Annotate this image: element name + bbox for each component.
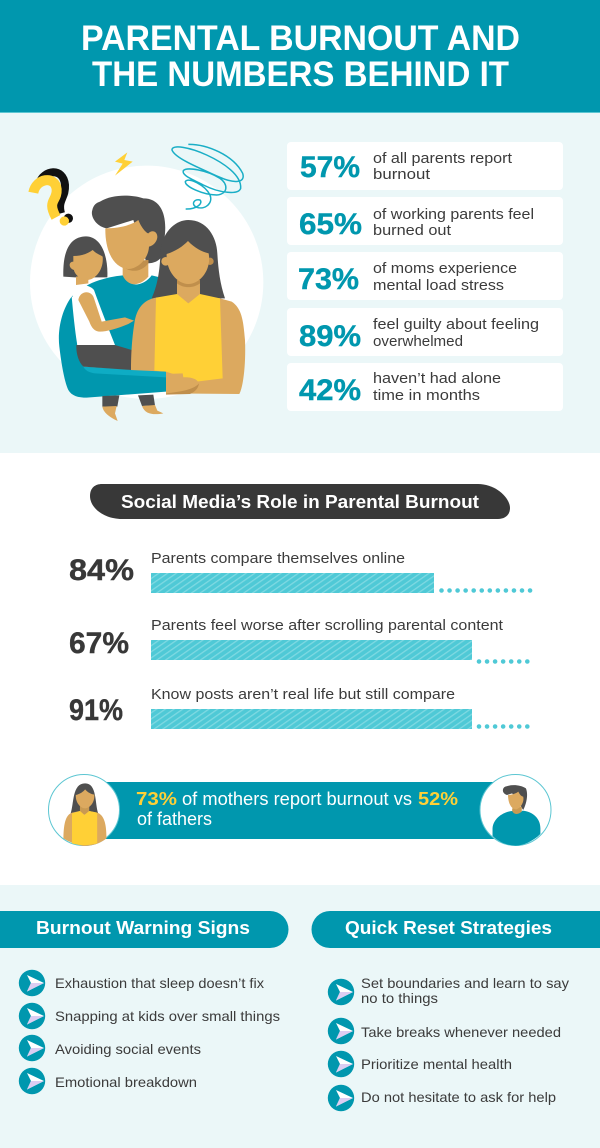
callout text: of fathers bbox=[137, 808, 212, 829]
stat card: 89%: feel guilty about feeling bbox=[373, 317, 539, 333]
callout text: 52% bbox=[418, 788, 458, 809]
stat card: 73%: 73% bbox=[298, 263, 359, 296]
panel: warning signs and strategies bbox=[0, 885, 600, 1148]
bar row: 84%: Parents compare themselves online bbox=[151, 551, 405, 567]
man: teal body and arm bbox=[72, 275, 173, 353]
stat card: 57%: burnout bbox=[373, 167, 430, 183]
item: ask for help bbox=[328, 1085, 556, 1111]
heading pill: Social Media’s Role in Parental Burnout bbox=[121, 491, 479, 512]
illustration: stressed family bbox=[30, 144, 263, 421]
stat card: 42% bbox=[287, 363, 563, 411]
callout: mothers vs fathers bbox=[48, 774, 551, 846]
heading pill bbox=[90, 484, 510, 519]
title: THE NUMBERS BEHIND IT bbox=[92, 55, 509, 94]
stat card: 89% bbox=[287, 308, 563, 356]
bar row: 67%: Parents feel worse after scrolling parental content bbox=[151, 618, 503, 634]
bar row: 91%: Know posts aren’t real life but still compare bbox=[151, 687, 455, 703]
list: warning signs bbox=[19, 970, 280, 1094]
stat card: 73% bbox=[287, 252, 563, 300]
man: neck and head bbox=[123, 260, 148, 284]
stat card: 42%: time in months bbox=[373, 388, 480, 404]
item: boundaries: Set boundaries and learn to say bbox=[361, 976, 569, 991]
child: trousers bbox=[76, 345, 132, 370]
item: take breaks bbox=[328, 1018, 561, 1044]
list: reset strategies bbox=[328, 976, 569, 1111]
stat card: 73%: of moms experience bbox=[373, 261, 517, 277]
bar row: 84% bbox=[69, 551, 532, 593]
item: ask for help: Do not hesitate to ask for help bbox=[361, 1090, 556, 1105]
child: legs and feet bbox=[102, 395, 119, 407]
title: PARENTAL BURNOUT AND bbox=[81, 19, 520, 58]
woman: arms and lap bbox=[131, 298, 245, 394]
item: mental health bbox=[328, 1051, 512, 1077]
man: hand bbox=[166, 373, 199, 393]
icon: mother portrait bbox=[48, 774, 120, 846]
item: take breaks: Take breaks whenever needed bbox=[361, 1025, 561, 1040]
stat card: 57%: 57% bbox=[300, 151, 360, 184]
child: shirt bbox=[72, 284, 115, 345]
item: boundaries bbox=[328, 976, 569, 1006]
heading: quick reset strategies bbox=[312, 911, 600, 948]
icon: scribble bbox=[172, 144, 243, 209]
icon: father portrait bbox=[480, 774, 551, 846]
stat card: 42%: haven’t had alone bbox=[373, 371, 501, 387]
callout text: of mothers report burnout vs bbox=[182, 788, 412, 809]
panel: social media role bbox=[0, 453, 600, 885]
bar row: 84%: 84% bbox=[69, 554, 134, 587]
icon: question mark bbox=[33, 172, 73, 226]
woman: neck and head bbox=[177, 280, 200, 303]
heading: quick reset strategies: Quick Reset Strategies bbox=[345, 917, 552, 938]
stat card: 65% bbox=[287, 197, 563, 245]
child: arm bbox=[78, 292, 134, 332]
heading: burnout warning signs: Burnout Warning Signs bbox=[36, 917, 250, 938]
stat card: 73%: mental load stress bbox=[373, 278, 504, 294]
bar row: 67%: 67% bbox=[69, 627, 129, 660]
callout text: 73% bbox=[136, 788, 177, 809]
stat card: 57% bbox=[287, 142, 563, 190]
bar row: 67% bbox=[69, 618, 528, 662]
item: exhaustion bbox=[19, 970, 264, 996]
item: emotional breakdown: Emotional breakdown bbox=[55, 1075, 197, 1090]
bar row: 91% bbox=[69, 687, 528, 729]
icon: lightning bolt bbox=[115, 152, 133, 176]
stat card: 42%: 42% bbox=[299, 374, 361, 407]
item: exhaustion: Exhaustion that sleep doesn’t fix bbox=[55, 976, 264, 991]
header band bbox=[0, 0, 600, 113]
stat card: 65%: burned out bbox=[373, 223, 451, 239]
callout text bbox=[136, 788, 458, 829]
item: snapping: Snapping at kids over small things bbox=[55, 1009, 280, 1024]
item: emotional breakdown bbox=[19, 1068, 197, 1094]
woman: hair bbox=[152, 220, 225, 298]
item: boundaries: no to things bbox=[361, 991, 438, 1006]
item: avoiding social events: Avoiding social events bbox=[55, 1042, 201, 1057]
item: avoiding social events bbox=[19, 1035, 201, 1061]
panel: burnout statistics bbox=[0, 113, 600, 453]
woman: yellow top bbox=[154, 294, 223, 382]
man: hair bbox=[92, 196, 165, 263]
child: hair and head bbox=[63, 236, 107, 277]
stat card: 65%: 65% bbox=[299, 208, 362, 241]
bar row: 91%: 91% bbox=[69, 694, 123, 727]
heading: burnout warning signs bbox=[0, 911, 288, 948]
title bbox=[81, 19, 520, 94]
stat card: 57%: of all parents report bbox=[373, 151, 512, 167]
stat card: 89%: 89% bbox=[299, 320, 361, 353]
item: snapping bbox=[19, 1003, 280, 1029]
stat card: 65%: of working parents feel bbox=[373, 207, 534, 223]
item: mental health: Prioritize mental health bbox=[361, 1057, 512, 1072]
stat card: 89%: overwhelmed bbox=[373, 334, 463, 350]
